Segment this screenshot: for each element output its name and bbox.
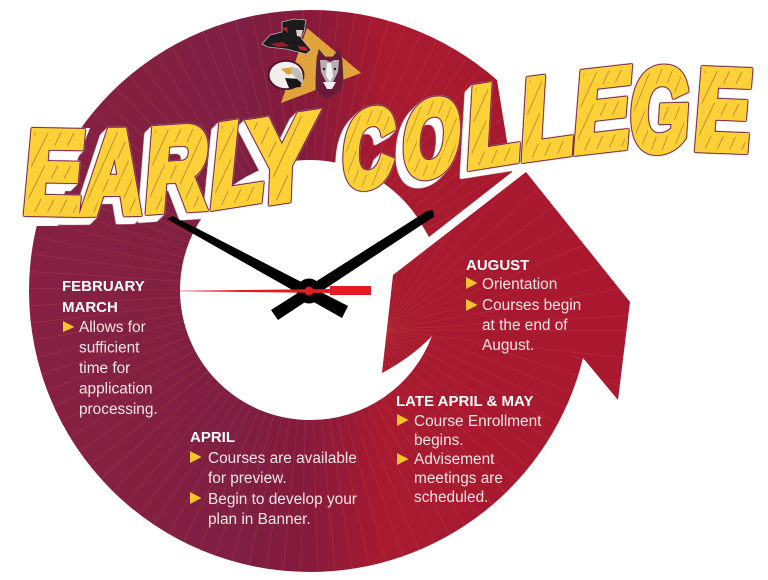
hub centre [304, 286, 314, 296]
text block: August: AUGUST [466, 257, 529, 274]
title: Early College: R [141, 101, 213, 236]
second hand [165, 286, 371, 295]
text block: February March: time for [79, 360, 130, 377]
text block: August: August. [482, 337, 534, 354]
clock hands [165, 210, 434, 320]
text block: Late April and May: Course Enrollment [414, 413, 542, 430]
mascot: husky [316, 49, 343, 98]
title: Early College: E [570, 45, 636, 177]
mascot: soldier [262, 19, 311, 54]
text block: Late April and May: scheduled. [414, 489, 488, 506]
title: Early College: L [518, 51, 577, 184]
text block: Late April and May: meetings are [414, 470, 503, 487]
text block: April: for preview. [208, 470, 287, 487]
title: Early College: A [79, 108, 148, 238]
title: Early College [19, 45, 756, 238]
emblem: gold triangle with mascots [262, 19, 361, 103]
text block: Late April and May: Advisement [414, 451, 495, 468]
text block: Late April and May: begins. [414, 432, 464, 449]
text block: April: Courses are available [208, 450, 357, 467]
title: Early College: E [691, 46, 756, 175]
title: Early College: O [399, 75, 464, 203]
text block: April: plan in Banner. [208, 511, 311, 528]
text block: February March: processing. [79, 401, 158, 418]
text block: August [466, 257, 581, 354]
mascot: eagle [268, 60, 304, 90]
title: Early College: E [19, 107, 89, 237]
text block: February March: Allows for [79, 319, 146, 336]
title: Early College: Y [245, 90, 317, 230]
text block: August: Orientation [482, 276, 557, 293]
text block: August: at the end of [482, 317, 568, 334]
title: Early College: G [627, 45, 694, 175]
circular arrow band [20, 10, 630, 572]
text block: April: APRIL [190, 429, 235, 446]
title: Early College: C [339, 85, 398, 214]
text block: Late April and May: LATE APRIL & MAY [396, 393, 534, 410]
text block: Late April and May [396, 393, 542, 506]
minute hand [271, 210, 434, 320]
hour hand [167, 216, 348, 318]
text block: February March: FEBRUARY [62, 278, 145, 295]
text block: April [190, 429, 357, 528]
title: Early College: L [206, 93, 272, 232]
text block: February March: sufficient [79, 340, 140, 356]
text block: August: Courses begin [482, 297, 581, 314]
text block: April: Begin to develop your [208, 491, 357, 508]
text block: February March: application [79, 380, 153, 398]
text block: February March: MARCH [62, 299, 118, 316]
text block: February March [62, 278, 158, 418]
title: Early College: L [464, 58, 524, 192]
clock hub [296, 278, 322, 304]
